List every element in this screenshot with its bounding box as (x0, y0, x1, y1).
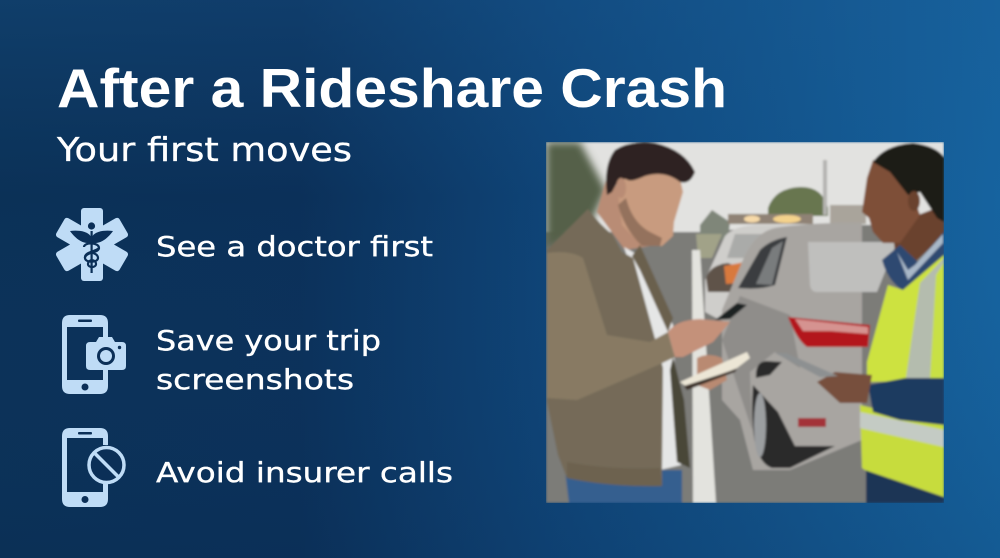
hi-vis vest upper (867, 255, 944, 382)
text: save your trip screenshots: screenshots (156, 364, 354, 396)
collar (882, 232, 944, 292)
hair (606, 142, 695, 195)
icon: phone with camera (62, 315, 126, 394)
t-shirt (624, 247, 681, 470)
photo: man and safety officer at crash scene (546, 142, 944, 503)
hands and tablet (817, 372, 872, 403)
icon: phone with prohibition sign (62, 428, 124, 507)
jacket right flap (670, 357, 690, 468)
vest reflective band (860, 412, 944, 447)
far vehicle with light bar (705, 214, 813, 320)
text: see a doctor first: See a doctor first (156, 231, 433, 263)
hair (873, 143, 944, 222)
title: After a Rideshare Crash (57, 57, 727, 119)
navy base (866, 470, 944, 503)
notebook and hand (697, 355, 727, 390)
icon: medical star of life (55, 208, 129, 281)
jeans (565, 470, 682, 503)
text: avoid insurer calls: Avoid insurer calls (156, 457, 453, 489)
text: save your trip screenshots (156, 325, 381, 396)
jacket hem (568, 464, 660, 486)
jacket front panel (632, 245, 673, 332)
jacket body (547, 209, 663, 486)
man (547, 142, 750, 503)
photo backdrop: sky, road and trees (546, 142, 944, 503)
sleeve (868, 378, 944, 425)
subtitle: Your first moves (56, 130, 352, 169)
vest lower (860, 405, 944, 497)
neck and face (597, 180, 650, 250)
neck (892, 205, 944, 262)
jacket sleeve (547, 252, 675, 400)
damaged silver car (722, 223, 897, 470)
vest reflective strap (906, 258, 944, 378)
face (862, 160, 920, 243)
officer in hi-vis vest (798, 142, 944, 503)
text: save your trip screenshots: Save your trip (156, 325, 381, 357)
hand with phone (668, 319, 730, 357)
